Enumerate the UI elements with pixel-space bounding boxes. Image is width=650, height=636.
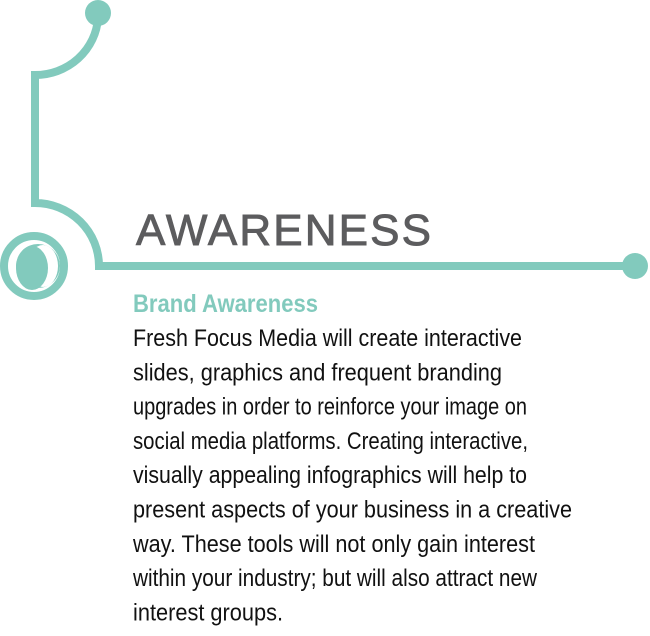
body text: way. These tools will not only gain interest: [132, 531, 535, 558]
icon: ring emblem: [4, 236, 64, 296]
body text: present aspects of your business in a creative: [133, 496, 572, 524]
body text: interest groups.: [133, 599, 283, 626]
body text: within your industry; but will also attract new: [132, 565, 538, 592]
icon: top dot: [85, 0, 111, 26]
subheading: Brand Awareness: [133, 290, 318, 318]
body text: slides, graphics and frequent branding: [133, 359, 502, 386]
body text: upgrades in order to reinforce your image on: [133, 394, 527, 421]
title: AWARENESS: [136, 206, 431, 255]
icon: right dot: [622, 253, 648, 279]
body text: [132, 325, 572, 626]
body text: social media platforms. Creating interactive,: [133, 428, 528, 455]
connector line: [35, 18, 635, 266]
body text: visually appealing infographics will help to: [133, 462, 527, 489]
body text: Fresh Focus Media will create interactive: [133, 325, 522, 352]
